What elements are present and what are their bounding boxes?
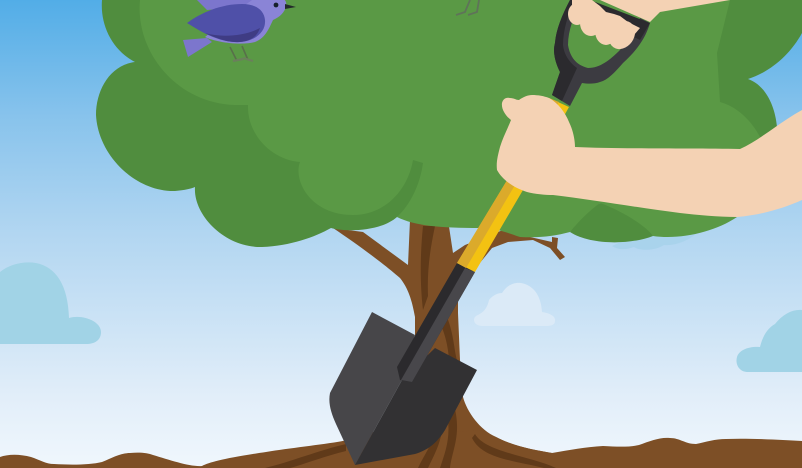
cloud: left [0, 262, 101, 344]
tree canopy [96, 0, 802, 247]
bird top wing [197, 0, 256, 10]
canopy: light front shape [140, 0, 790, 237]
cloud: behind canopy [612, 228, 698, 250]
back of hand and forearm [600, 0, 730, 22]
bark grooves [421, 226, 457, 360]
ground [0, 430, 802, 468]
second bird feet [456, 0, 479, 15]
canopy: right dark lobes [700, 0, 802, 150]
bird wing [187, 4, 265, 42]
grip band above fingers [590, 0, 650, 40]
shovel blade: light half [329, 312, 415, 465]
shovel D-grip shaded side [552, 0, 577, 101]
bird legs [230, 46, 248, 61]
shovel [329, 0, 650, 465]
fingers [568, 0, 640, 54]
bird feet [233, 58, 253, 61]
bird eye [274, 3, 278, 7]
front hand and forearm [497, 95, 802, 217]
shovel blade: dark half [355, 348, 477, 465]
bird tail [183, 38, 212, 57]
ground root grooves [265, 405, 556, 468]
shovel D-grip [552, 0, 650, 106]
shovel handle shaded side [457, 98, 559, 268]
canopy: lower dark lobe [570, 203, 653, 242]
shovel socket shaft [397, 263, 475, 382]
bird body [205, 0, 286, 44]
bird: large purple [183, 0, 296, 61]
tree trunk and branches [260, 220, 565, 468]
canopy: dark rear shape [96, 0, 445, 247]
shovel yellow handle [457, 98, 569, 272]
bird beak [285, 4, 296, 9]
shovel socket highlight [401, 268, 475, 382]
back hand gripping handle [568, 0, 730, 54]
cloud: right [736, 310, 802, 372]
cloud: centre [474, 283, 555, 326]
bird wing speckle [205, 28, 260, 42]
